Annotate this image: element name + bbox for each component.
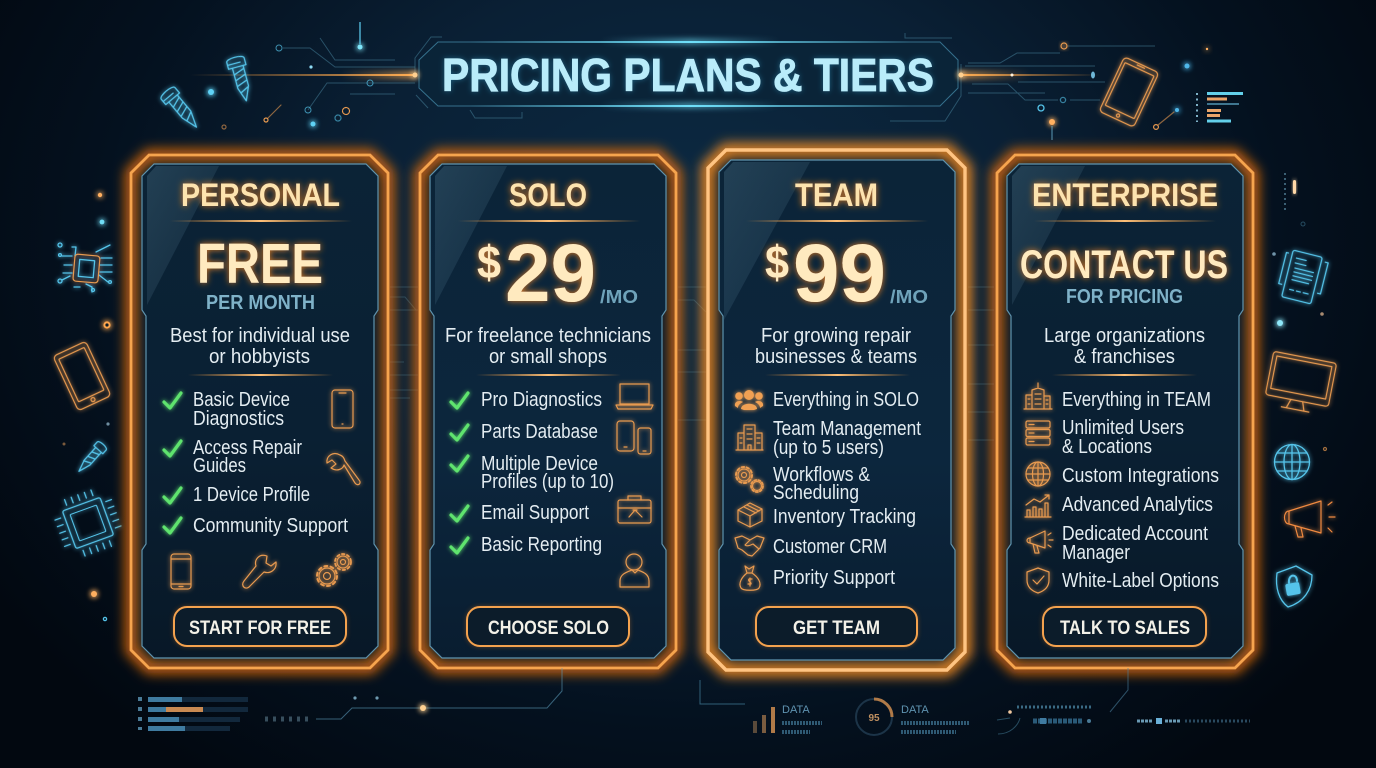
button: choose solo <box>467 607 629 646</box>
icon: wrench bottom <box>243 555 276 588</box>
icon: screw left <box>74 440 108 475</box>
feature list: & Locations <box>1062 436 1152 458</box>
feature list: Scheduling <box>773 482 859 504</box>
footer data label second <box>901 704 970 732</box>
feature list: Basic Reporting <box>481 534 602 556</box>
footer data label <box>782 704 822 732</box>
button: get team: GET TEAM <box>793 617 880 639</box>
description: or small shops <box>489 346 607 368</box>
footer data label second: DATA <box>901 704 929 716</box>
button: get team <box>756 607 917 646</box>
icon: handshake <box>735 536 764 556</box>
left side icons and dots <box>62 193 110 621</box>
footer gauge <box>856 699 892 735</box>
description: For growing repair <box>761 325 911 347</box>
button: start for free <box>174 607 346 646</box>
icon: screw <box>156 84 206 134</box>
card: enterprise <box>997 155 1253 668</box>
footer data label: DATA <box>782 704 810 716</box>
icon: person <box>620 554 649 587</box>
icon: globe <box>1026 462 1050 486</box>
footer circuit line <box>265 668 562 719</box>
description: or hobbyists <box>209 346 310 368</box>
price note: FOR PRICING <box>1066 286 1183 308</box>
icon: phone left <box>53 341 111 411</box>
icon: phones <box>617 421 651 454</box>
feature list: Parts Database <box>481 421 598 443</box>
price unit: /MO <box>890 287 928 307</box>
description <box>445 325 651 368</box>
icon: phone <box>332 390 353 428</box>
icon: circuit chip <box>58 243 112 292</box>
feature list <box>164 389 348 537</box>
footer bars left <box>140 697 248 731</box>
icon: screw upright <box>226 55 255 103</box>
price unit: /MO <box>600 287 638 307</box>
feature list: Pro Diagnostics <box>481 389 602 411</box>
feature list: (up to 5 users) <box>773 437 884 459</box>
icon: laptop <box>616 384 653 409</box>
right side icons and dots <box>1272 173 1326 450</box>
icon: tablet phone top right <box>1099 57 1159 127</box>
button: start for free: START FOR FREE <box>189 617 331 639</box>
icon: globe right <box>1274 444 1310 480</box>
feature list: Community Support <box>193 515 348 537</box>
icon: processor chip <box>50 485 126 561</box>
circuit lines top left <box>190 22 418 129</box>
icon: megaphone <box>1027 531 1053 553</box>
icon: money bag <box>740 566 760 590</box>
icon: phone bottom <box>171 554 191 589</box>
description: Best for individual use <box>170 325 350 347</box>
icon: monitor <box>1264 351 1337 416</box>
heading: solo: SOLO <box>509 177 587 213</box>
description: & franchises <box>1074 346 1175 368</box>
icon: analytics chart <box>1025 495 1051 517</box>
feature list: Guides <box>193 455 246 477</box>
feature list: Priority Support <box>773 567 895 589</box>
description: Large organizations <box>1044 325 1205 347</box>
feature list: Profiles (up to 10) <box>481 471 614 493</box>
price: $99: $ <box>765 236 789 288</box>
feature list: Dedicated Account <box>1062 523 1208 545</box>
price: $29: 29 <box>505 228 596 319</box>
price: $99: 99 <box>793 228 886 319</box>
feature list: Customer CRM <box>773 536 887 558</box>
circuit traces between cards <box>390 287 994 440</box>
description <box>755 325 917 368</box>
card: solo <box>420 155 676 668</box>
feature list: 1 Device Profile <box>193 484 310 506</box>
feature list: Manager <box>1062 542 1130 564</box>
feature list: Basic Device <box>193 389 290 411</box>
feature list: Everything in TEAM <box>1062 389 1211 411</box>
icon: document <box>1276 249 1329 306</box>
feature list: Multiple Device <box>481 453 598 475</box>
feature list: Advanced Analytics <box>1062 494 1213 516</box>
button: choose solo: CHOOSE SOLO <box>488 617 609 639</box>
icon: gears <box>736 467 763 492</box>
feature list: Workflows & <box>773 464 871 486</box>
button: talk to sales: TALK TO SALES <box>1060 617 1190 639</box>
footer tech marks <box>997 668 1250 734</box>
card: team <box>708 150 965 670</box>
description: businesses & teams <box>755 346 917 368</box>
icon: building <box>736 425 763 450</box>
icon: server <box>1026 421 1050 445</box>
feature list: Everything in SOLO <box>773 389 919 411</box>
price: $29: $ <box>477 236 501 288</box>
icon: megaphone right <box>1284 501 1335 537</box>
icon: wrench <box>327 454 360 485</box>
title: PRICING PLANS & TIERS <box>442 49 934 101</box>
card: personal <box>131 155 388 668</box>
feature list: Inventory Tracking <box>773 506 916 528</box>
feature list: Access Repair <box>193 437 302 459</box>
feature list <box>773 389 921 589</box>
heading: enterprise: ENTERPRISE <box>1032 177 1218 213</box>
footer bracket <box>700 680 745 704</box>
feature list: White-Label Options <box>1062 570 1219 592</box>
circuit lines top right <box>958 43 1208 140</box>
footer gauge: 95 <box>868 713 880 724</box>
icon: shield lock <box>1276 566 1312 607</box>
feature list: Email Support <box>481 502 589 524</box>
footer bar chart <box>753 707 775 733</box>
mini bars top right <box>1197 92 1243 122</box>
feature list <box>1062 389 1219 592</box>
icon: gears <box>317 554 351 586</box>
feature list <box>451 389 614 556</box>
feature list: Diagnostics <box>193 408 284 430</box>
button: talk to sales <box>1043 607 1206 646</box>
feature list: Unlimited Users <box>1062 417 1184 439</box>
price note: PER MONTH <box>206 292 315 314</box>
price: free: FREE <box>197 232 323 296</box>
price: contact us: CONTACT US <box>1020 243 1228 287</box>
feature list: Custom Integrations <box>1062 465 1219 487</box>
description <box>170 325 350 368</box>
icon: city <box>1024 383 1052 409</box>
icon: box <box>738 503 762 527</box>
icon: shield <box>1027 568 1049 593</box>
icon: people <box>735 390 763 410</box>
feature list: Team Management <box>773 418 921 440</box>
description <box>1044 325 1205 368</box>
title banner <box>415 33 961 121</box>
icon: toolbox <box>618 496 651 523</box>
heading: team: TEAM <box>795 177 878 213</box>
description: For freelance technicians <box>445 325 651 347</box>
heading: personal: PERSONAL <box>181 177 340 213</box>
